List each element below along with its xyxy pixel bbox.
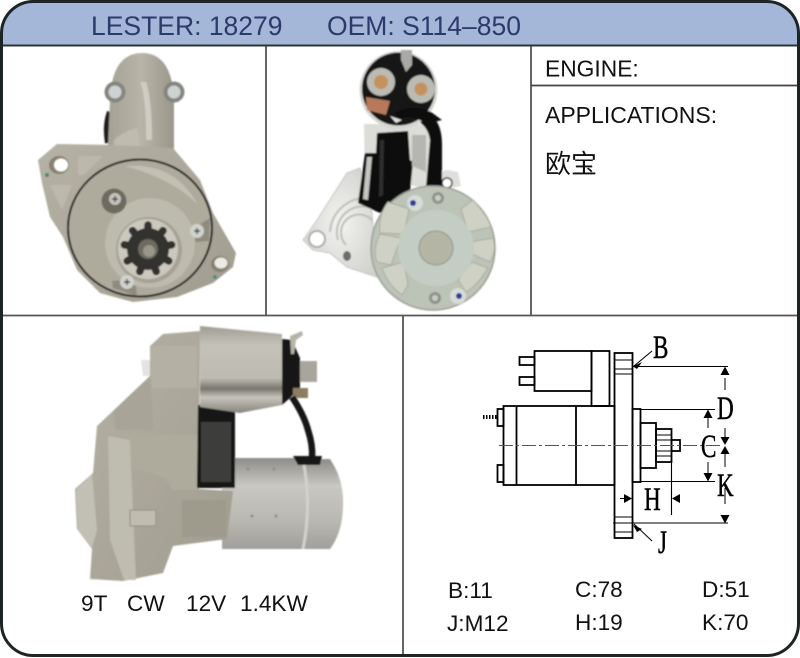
motor cable <box>292 397 312 458</box>
application value: 欧宝 <box>545 144 597 181</box>
dimension values table: D:51 <box>702 577 750 602</box>
centre line <box>499 444 723 446</box>
dimension shafts <box>620 378 725 504</box>
retaining tabs <box>188 218 210 242</box>
photo spec caption: 1.4KW <box>240 591 308 616</box>
applications label: APPLICATIONS: <box>545 102 717 128</box>
dimension letters: H <box>644 482 661 518</box>
dimension values table: B:11 <box>448 578 493 603</box>
dimension letters: B <box>653 330 668 366</box>
rear cover centre disc <box>398 210 474 286</box>
dimension letters: C <box>701 429 716 465</box>
motor end cap <box>303 459 343 549</box>
dimension arrows <box>624 362 730 532</box>
dimension values table: J:M12 <box>447 611 509 636</box>
drive housing <box>75 331 233 581</box>
dimension values table: C:78 <box>575 577 623 602</box>
photo spec caption: CW <box>127 591 165 616</box>
flange holes <box>45 156 229 279</box>
end plate <box>68 160 212 296</box>
header text: part numbers: OEM: S114–850 <box>327 11 521 41</box>
solenoid barrel <box>200 326 282 413</box>
panel: side view photo of starter <box>75 326 343 581</box>
dimension values table <box>447 577 750 636</box>
panel: front view photo of starter <box>38 53 236 302</box>
black bracket <box>197 405 235 488</box>
solenoid terminal cap <box>360 51 438 129</box>
leader lines <box>634 351 652 541</box>
pinion gear <box>124 225 172 272</box>
drive nose outline <box>632 409 680 482</box>
header text: part numbers: LESTER: 18279 <box>91 11 283 41</box>
dimension letters: D <box>717 391 734 427</box>
dimension letters: K <box>717 468 734 504</box>
solenoid cap and terminals <box>282 331 317 405</box>
black body and bracket <box>358 131 413 213</box>
motor outline <box>483 406 614 485</box>
engine label: ENGINE: <box>545 56 639 82</box>
solenoid outline <box>520 351 610 406</box>
rear cover <box>371 186 495 310</box>
photo spec caption <box>81 591 308 616</box>
dimension values table: K:70 <box>702 610 748 635</box>
silver front flange <box>303 168 377 277</box>
nose hub <box>105 198 195 288</box>
rear cover screws <box>407 192 466 304</box>
dimension values table: H:19 <box>575 610 623 635</box>
copper terminals <box>366 68 442 124</box>
dimension letters: J <box>658 525 667 561</box>
mounting bolts <box>104 82 184 102</box>
header band <box>2 2 798 46</box>
extension lines <box>613 366 728 523</box>
panel: rear view photo of starter <box>303 50 495 310</box>
armature housing <box>222 458 308 549</box>
dimension drawing <box>483 330 734 561</box>
silver solenoid barrel <box>364 124 432 190</box>
mounting flange outline <box>614 353 633 538</box>
mounting flange <box>38 144 236 302</box>
solenoid mount housing <box>108 53 174 150</box>
cable behind housing <box>107 112 110 143</box>
dimension letters <box>644 330 734 561</box>
photo spec caption: 9T <box>81 591 108 616</box>
plate screws <box>102 188 204 289</box>
header text: part numbers <box>91 11 521 41</box>
photo spec caption: 12V <box>186 591 226 616</box>
